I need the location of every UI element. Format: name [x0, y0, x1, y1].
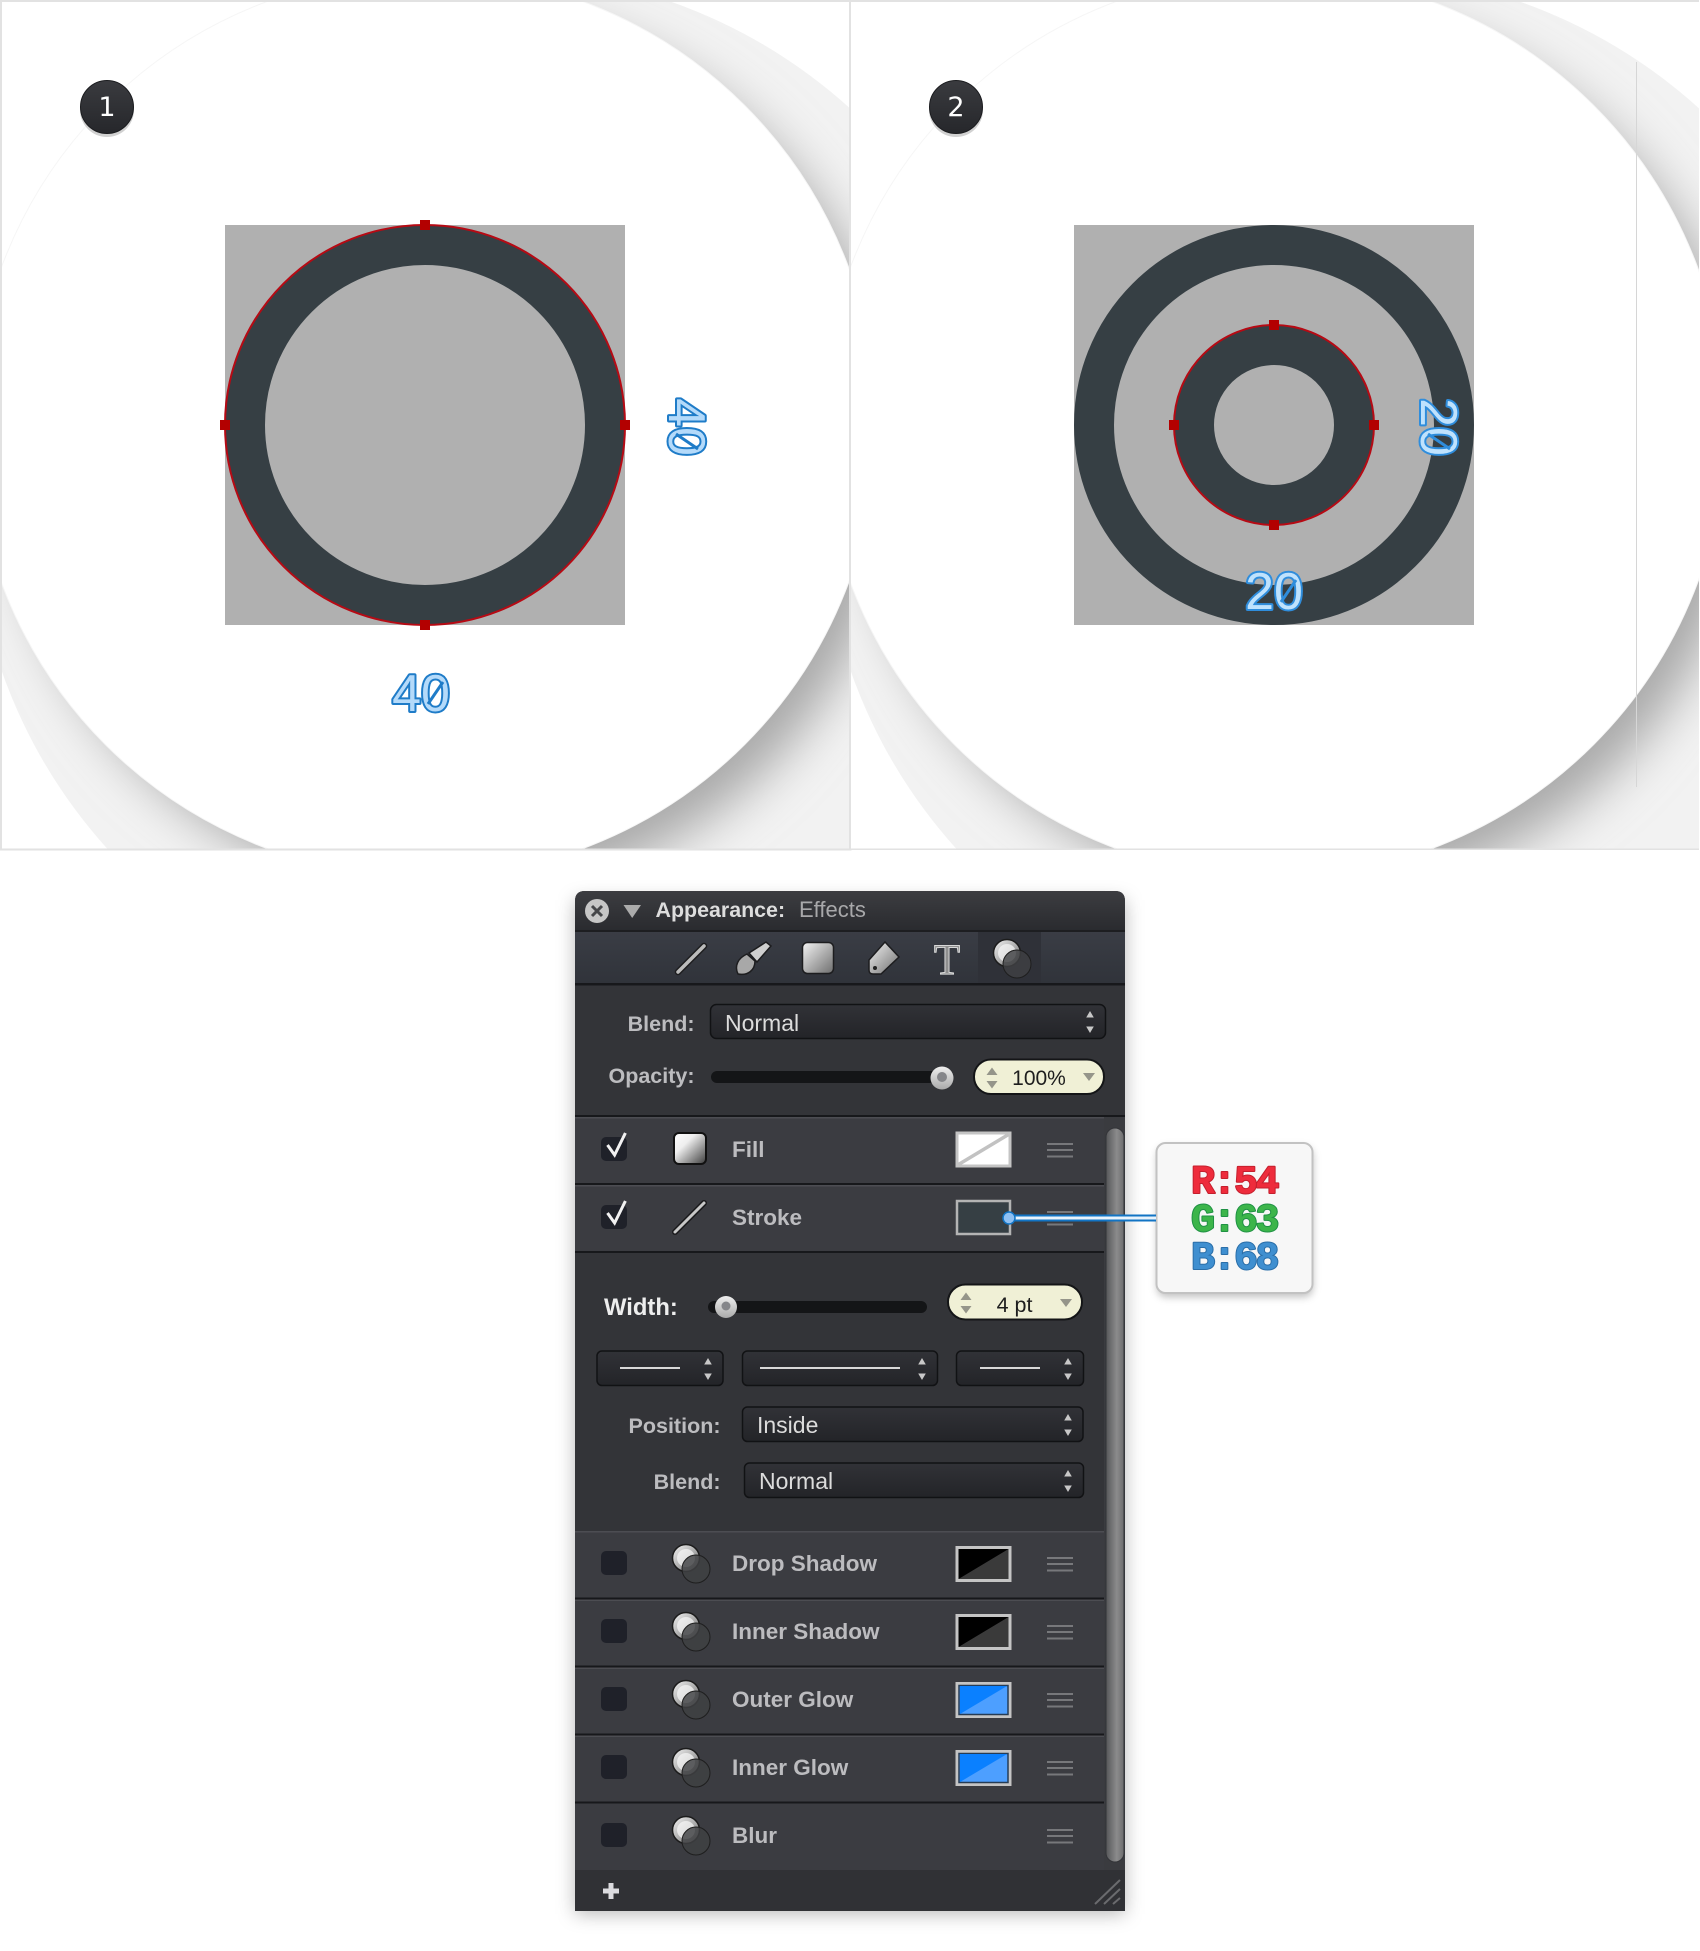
icon: effect: [672, 1748, 710, 1787]
position label: Position:: [629, 1414, 720, 1438]
width label: Width:: [604, 1294, 678, 1321]
position dropdown: [742, 1407, 1083, 1442]
icon: fill square: [802, 942, 834, 974]
icon: brush: [736, 942, 771, 974]
label: Drop Shadow: [732, 1551, 877, 1576]
icon: tag: [869, 942, 899, 974]
dash style dropdown: [742, 1351, 938, 1386]
panel: step 1 large circle: [0, 0, 897, 897]
red value: R:54: [1191, 1161, 1279, 1206]
green value: G:63: [1191, 1199, 1278, 1244]
icon: resize grip: [1095, 1880, 1120, 1904]
icon: drag handle: [1047, 1143, 1073, 1158]
checkbox: [601, 1551, 627, 1575]
stroke settings section: [575, 1251, 1104, 1498]
blend dropdown: [710, 1004, 1106, 1038]
grey 40x40 square with ring: [220, 220, 630, 630]
icon: effects tool: [994, 940, 1031, 978]
dimension label: 40 bottom: 40: [392, 665, 450, 723]
icon: drag handle: [1047, 1557, 1073, 1572]
callout: stroke colour RGB values: [1156, 1143, 1313, 1297]
icon: drag handle: [1047, 1829, 1073, 1844]
checkbox checked: [601, 1133, 627, 1161]
row: drop shadow: [575, 1531, 1104, 1599]
stroke blend label: Blend:: [654, 1470, 720, 1494]
stroke label: Stroke: [732, 1205, 802, 1230]
stroke blend dropdown: [744, 1463, 1084, 1498]
label: Blur: [732, 1823, 777, 1848]
subtitle text: Effects: [799, 897, 866, 922]
checkbox checked: [601, 1201, 627, 1229]
row: blur: [575, 1802, 1104, 1870]
icon: drag handle: [1047, 1625, 1073, 1640]
connector arrow from swatch to callout: [1003, 1212, 1156, 1224]
icon: text tool: T: [934, 937, 960, 984]
arrowhead end dropdown: [956, 1351, 1084, 1386]
label: Inner Glow: [732, 1755, 849, 1780]
grey square with outer and inner rings: [1074, 225, 1474, 625]
checkbox: [601, 1755, 627, 1779]
dimension label: 20 right: 20: [1409, 398, 1467, 456]
width field: [948, 1284, 1082, 1320]
icon: drag handle: [1047, 1211, 1073, 1226]
swatch: black: [957, 1548, 1010, 1580]
swatch: black: [957, 1616, 1010, 1648]
dimension label: 40 right: 40: [657, 398, 715, 456]
opacity field: 100%: [1012, 1067, 1066, 1090]
checkbox: [601, 1619, 627, 1643]
step badge 1: 1: [98, 92, 116, 123]
stroke blend dropdown: Normal: [759, 1468, 833, 1494]
row: fill: [575, 1115, 1125, 1184]
checkbox: [601, 1823, 627, 1847]
fill label: Fill: [732, 1137, 764, 1162]
opacity and blend section: [608, 1004, 1106, 1094]
row: inner glow: [575, 1734, 1104, 1803]
opacity label: Opacity:: [608, 1064, 694, 1088]
label: Inner Shadow: [732, 1619, 880, 1644]
width field: 4 pt: [997, 1293, 1032, 1317]
row: inner shadow: [575, 1598, 1104, 1667]
title bar: [575, 891, 1125, 932]
width slider: [708, 1296, 927, 1318]
icon: close button: [585, 899, 609, 923]
icon: line inner: [678, 946, 704, 972]
icon: effect: [672, 1544, 710, 1583]
icon: effect: [672, 1612, 710, 1651]
swatch: stroke colour: [957, 1201, 1010, 1234]
icon: stroke line: [678, 946, 704, 972]
row: stroke: [575, 1183, 1104, 1252]
row: outer glow: [575, 1666, 1104, 1735]
blend label: Blend:: [628, 1012, 694, 1036]
panel: step 2 large circle: [822, 0, 1700, 897]
icon: add: [603, 1883, 619, 1899]
step badge 1: [80, 80, 134, 137]
icon: drag handle: [1047, 1761, 1073, 1776]
position dropdown: Inside: [757, 1412, 818, 1438]
title text: Appearance:: [656, 898, 785, 922]
icon: effect: [672, 1816, 710, 1855]
opacity slider: [711, 1066, 954, 1090]
swatch: blue: [957, 1684, 1010, 1716]
step badge 2: 2: [947, 92, 965, 123]
icon: effect: [672, 1680, 710, 1719]
step badge 2: [929, 80, 983, 137]
swatch: none: [957, 1133, 1010, 1166]
checkbox: [601, 1687, 627, 1711]
blend dropdown: Normal: [725, 1010, 799, 1036]
label: Outer Glow: [732, 1687, 854, 1712]
icon: disclosure triangle: [624, 905, 641, 918]
dimension label: 20 bottom: 20: [1245, 563, 1303, 621]
icon: fill square: [674, 1133, 706, 1164]
toolbar: [575, 932, 1125, 986]
footer bar: [575, 1870, 1125, 1911]
swatch: blue: [957, 1752, 1010, 1784]
blue value: B:68: [1191, 1237, 1278, 1282]
opacity field: [974, 1060, 1104, 1094]
icon: drag handle: [1047, 1693, 1073, 1708]
icon: stroke: [675, 1203, 704, 1232]
arrowhead start dropdown: [597, 1351, 723, 1386]
panel: appearance effects window: [575, 891, 1125, 1914]
guide line: [1636, 62, 1637, 787]
scrollbar: [1104, 1117, 1125, 1870]
